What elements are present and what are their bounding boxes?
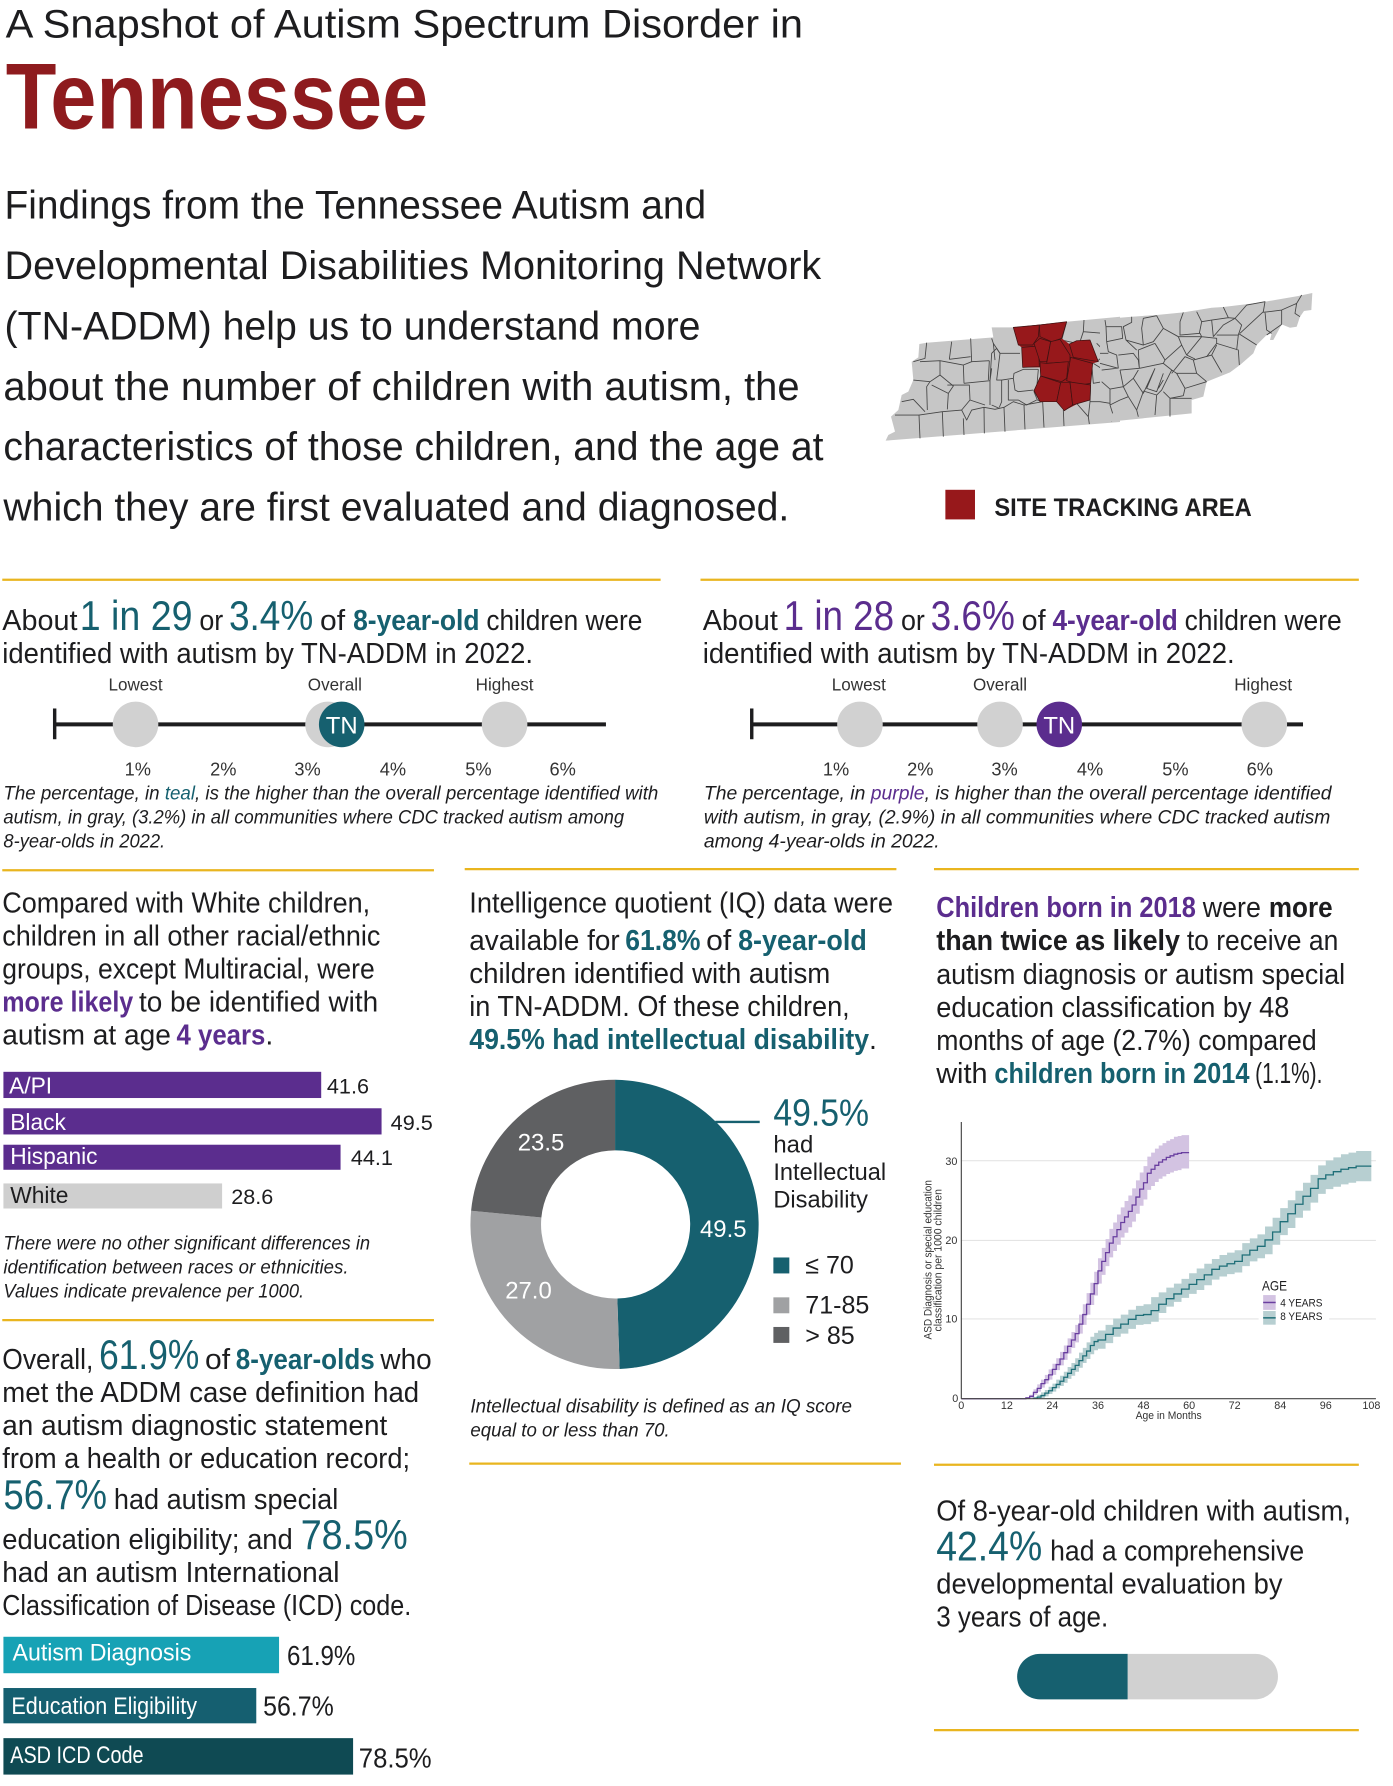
scale note: 8-year-olds in 2022. [3, 830, 165, 852]
donut legend: 71-85 [805, 1291, 869, 1319]
panel: IQ data [469, 887, 893, 1441]
scale note [3, 783, 658, 852]
percentage scale: 8-year-olds: 4% [380, 760, 406, 780]
panel: 8-year-old prevalence [2, 592, 658, 852]
line chart: cumulative incidence: 60 [1183, 1400, 1195, 1412]
documentation text: had an autism International [2, 1557, 339, 1589]
documentation text: from a health or education record; [2, 1443, 410, 1475]
documentation text: 56.7% [3, 1471, 107, 1518]
percentage scale: 4-year-olds [752, 675, 1303, 780]
prevalence headline: About [703, 605, 778, 637]
donut legend [773, 1251, 869, 1350]
intro text: characteristics of those children, and the age at [3, 425, 823, 469]
donut callout: Intellectual [773, 1159, 886, 1186]
line chart: cumulative incidence: 96 [1320, 1400, 1332, 1412]
chart legend: AGE [1262, 1279, 1287, 1294]
line chart: cumulative incidence: 72 [1229, 1400, 1241, 1412]
scale note: The percentage, in teal, is the higher than the overall percentage identified with [3, 783, 658, 805]
scale note: autism, in gray, (3.2%) in all communities where CDC tracked autism among [3, 807, 624, 829]
prevalence headline: children were [1185, 605, 1342, 637]
intro text [2, 184, 823, 530]
race text: Compared with White children, [2, 887, 370, 919]
cohort text: more [1269, 892, 1333, 924]
documentation text: 61.9% [99, 1331, 199, 1378]
prevalence headline: identified with autism by TN-ADDM in 2022. [2, 638, 533, 670]
documentation text: of [205, 1344, 230, 1376]
documentation text: education eligibility; and [2, 1524, 293, 1556]
line chart: cumulative incidence: 24 [1046, 1400, 1058, 1412]
cohort text: Children born in 2018 [936, 892, 1196, 924]
bar chart: documentation types [3, 1637, 432, 1775]
line chart: cumulative incidence: 20 [945, 1235, 957, 1247]
cohort text: autism diagnosis or autism special [936, 959, 1345, 991]
line chart: cumulative incidence: 30 [945, 1156, 957, 1168]
line chart: cumulative incidence: 12 [1001, 1400, 1013, 1412]
IQ text: 49.5% had intellectual disability [469, 1024, 869, 1056]
race note: identification between races or ethnicities. [3, 1256, 349, 1278]
percentage scale: 8-year-olds: 1% [125, 760, 151, 780]
percentage scale: 8-year-olds: 3% [294, 760, 321, 780]
evaluation text: 42.4% [936, 1522, 1042, 1569]
chart legend: 8 YEARS [1280, 1311, 1323, 1323]
documentation text [2, 1331, 432, 1622]
donut legend: > 85 [805, 1322, 855, 1350]
percentage scale: 8-year-olds [55, 675, 606, 780]
IQ text: Intelligence quotient (IQ) data were [469, 887, 893, 919]
donut callout: 49.5% [773, 1091, 869, 1133]
bar chart: documentation types: Education Eligibility [11, 1693, 197, 1720]
bar chart: documentation types: 78.5% [359, 1743, 432, 1774]
documentation text: an autism diagnostic statement [2, 1410, 387, 1442]
map legend: SITE TRACKING AREA [994, 494, 1252, 522]
cohort text: education classification by 48 [936, 992, 1289, 1024]
percentage scale: 4-year-olds: Overall [973, 675, 1027, 694]
prevalence headline [703, 592, 1342, 670]
prevalence headline: identified with autism by TN-ADDM in 2022. [703, 638, 1235, 670]
panel: birth cohort comparison [923, 892, 1380, 1422]
race note [3, 1233, 370, 1302]
line chart: cumulative incidence: 84 [1274, 1400, 1286, 1412]
race text [2, 887, 380, 1051]
title: A Snapshot of Autism Spectrum Disorder in [6, 3, 803, 47]
documentation text: met the ADDM case definition had [2, 1377, 419, 1409]
evaluation text: developmental evaluation by [936, 1568, 1283, 1600]
bar chart: prevalence by race: 44.1 [351, 1145, 393, 1170]
donut chart: 23.5 [518, 1129, 564, 1156]
title: Tennessee [6, 44, 428, 149]
IQ text [469, 887, 893, 1056]
IQ note [470, 1395, 852, 1441]
intro text: Developmental Disabilities Monitoring Network [5, 244, 821, 288]
IQ text: . [869, 1024, 877, 1056]
line chart: cumulative incidence: 0 [958, 1400, 964, 1412]
percentage scale: 8-year-olds: Lowest [108, 675, 163, 694]
intro text: Findings from the Tennessee Autism and [5, 184, 706, 228]
prevalence headline: or [901, 605, 925, 637]
prevalence headline: or [199, 605, 223, 637]
race text: to be identified with [139, 986, 378, 1018]
prevalence headline: 1 in 28 [784, 592, 894, 639]
panel: documentation [2, 1331, 432, 1775]
site tracking counties [1013, 322, 1098, 411]
documentation text: Overall, [2, 1344, 93, 1376]
documentation text: 8-year-olds [236, 1344, 375, 1376]
percentage scale: 4-year-olds: Lowest [832, 675, 886, 694]
prevalence headline: 3.4% [229, 592, 313, 639]
line chart: cumulative incidence: 48 [1138, 1400, 1150, 1412]
cohort text [935, 892, 1345, 1090]
panel: 4-year-old prevalence [703, 592, 1342, 852]
prevalence headline: 8-year-old [353, 605, 480, 637]
race note: There were no other significant differences in [3, 1233, 370, 1255]
panel: comprehensive evaluation [936, 1496, 1351, 1699]
line chart: cumulative incidence: 108 [1362, 1400, 1380, 1412]
race note: Values indicate prevalence per 1000. [3, 1280, 304, 1302]
IQ text: children identified with autism [469, 958, 830, 990]
line chart: cumulative incidence: 36 [1092, 1400, 1104, 1412]
race text: 4 years [177, 1019, 265, 1051]
prevalence headline: of [320, 605, 345, 637]
percentage scale: 4-year-olds: TN [1043, 713, 1075, 740]
percentage scale: 8-year-olds: Overall [308, 675, 362, 694]
scale note [704, 783, 1333, 852]
cohort text: than twice as likely [936, 925, 1180, 957]
donut callout [715, 1091, 886, 1213]
percentage scale: 4-year-olds: 1% [823, 760, 849, 780]
race text: more likely [2, 986, 133, 1018]
percentage scale: 8-year-olds: 5% [465, 760, 492, 780]
IQ text: of [706, 925, 731, 957]
cohort text: were [1202, 892, 1261, 924]
cohort text: to receive an [1187, 925, 1338, 957]
race text: groups, except Multiracial, were [2, 953, 375, 985]
chart legend: 4 YEARS [1280, 1297, 1323, 1309]
line chart: cumulative incidence: 10 [945, 1313, 957, 1325]
IQ text: available for [469, 925, 620, 957]
race text: autism at age [2, 1019, 171, 1051]
race text: children in all other racial/ethnic [2, 920, 380, 952]
percentage scale: 8-year-olds: 2% [210, 760, 236, 780]
IQ text: in TN-ADDM. Of these children, [469, 991, 850, 1023]
intro text: about the number of children with autism, the [3, 365, 800, 409]
bar chart: documentation types: 56.7% [263, 1690, 334, 1721]
bar chart: prevalence by race: White [10, 1182, 68, 1208]
cohort text: children born in 2014 [994, 1058, 1250, 1090]
prevalence headline: 1 in 29 [80, 592, 192, 639]
bar chart: prevalence by race: Black [10, 1109, 67, 1135]
IQ note: equal to or less than 70. [470, 1419, 670, 1441]
donut callout: Disability [773, 1186, 868, 1213]
bar chart: documentation types: Autism Diagnosis [13, 1640, 191, 1667]
bar chart: prevalence by race: 28.6 [231, 1184, 273, 1209]
bar chart: prevalence by race [3, 1072, 433, 1209]
bar chart: prevalence by race: 49.5 [391, 1110, 433, 1135]
evaluation text: Of 8-year-old children with autism, [936, 1496, 1351, 1528]
line chart: cumulative incidence: classification per 1000 children [932, 1189, 944, 1332]
prevalence headline: About [2, 605, 78, 637]
bar chart: documentation types: 61.9% [287, 1640, 355, 1671]
percentage scale: 4-year-olds: 2% [907, 760, 933, 780]
evaluation text: 3 years of age. [936, 1602, 1108, 1634]
cohort text: with [935, 1058, 988, 1090]
map of Tennessee with site tracking area [886, 293, 1312, 441]
percentage scale: 8-year-olds: 6% [549, 760, 576, 780]
intro text: which they are first evaluated and diagnosed. [2, 486, 789, 530]
documentation text: who [379, 1344, 432, 1376]
documentation text: Classification of Disease (ICD) code. [2, 1590, 411, 1622]
donut chart [470, 1080, 759, 1369]
donut chart: 27.0 [505, 1277, 552, 1304]
IQ note: Intellectual disability is defined as an IQ score [470, 1395, 852, 1417]
line chart: cumulative incidence: ASD Diagnosis or special education [923, 1180, 935, 1339]
line chart: cumulative incidence: Age in Months [1136, 1410, 1202, 1422]
panel: race and ethnicity [2, 887, 433, 1302]
scale note: The percentage, in purple, is higher than the overall percentage identified [704, 783, 1333, 805]
bar chart: prevalence by race: Hispanic [10, 1143, 98, 1169]
percentage scale: 8-year-olds: Highest [476, 675, 534, 694]
donut chart: 49.5 [700, 1216, 747, 1243]
title [6, 3, 803, 149]
chart legend [1259, 1276, 1329, 1326]
prevalence headline: children were [486, 605, 642, 637]
percentage scale: 4-year-olds: 3% [991, 760, 1018, 780]
IQ text: 61.8% [625, 925, 700, 957]
race text: . [265, 1019, 273, 1051]
prevalence headline: 3.6% [931, 592, 1015, 639]
percentage scale: 4-year-olds: 4% [1077, 760, 1103, 780]
donut callout: had [773, 1132, 813, 1159]
scale note: among 4-year-olds in 2022. [704, 830, 940, 852]
bar chart: prevalence by race: A/PI [9, 1072, 52, 1098]
cohort text: (1.1%). [1255, 1058, 1322, 1090]
prevalence headline: of [1022, 605, 1046, 637]
intro text: (TN-ADDM) help us to understand more [5, 304, 700, 348]
IQ text: 8-year-old [738, 925, 867, 957]
percentage scale: 4-year-olds: Highest [1234, 675, 1292, 694]
bar chart: documentation types: ASD ICD Code [10, 1742, 144, 1769]
scale note: with autism, in gray, (2.9%) in all communities where CDC tracked autism [704, 807, 1330, 829]
evaluation text [936, 1496, 1351, 1634]
donut legend: ≤ 70 [805, 1251, 854, 1279]
percentage scale: 4-year-olds: 5% [1162, 760, 1189, 780]
evaluation text: had a comprehensive [1050, 1535, 1304, 1567]
cohort text: months of age (2.7%) compared [936, 1025, 1317, 1057]
percentage scale: 8-year-olds: TN [326, 713, 358, 740]
percentage scale: 4-year-olds: 6% [1247, 760, 1273, 780]
bar chart: prevalence by race: 41.6 [327, 1073, 369, 1098]
prevalence headline [2, 592, 642, 670]
prevalence headline: 4-year-old [1052, 605, 1178, 637]
documentation text: 78.5% [301, 1511, 408, 1558]
line chart: cumulative incidence: 0 [952, 1393, 958, 1405]
line chart: cumulative incidence [923, 1122, 1380, 1422]
documentation text: had autism special [114, 1484, 338, 1516]
pill progress bar 42.4% [1017, 1654, 1278, 1699]
